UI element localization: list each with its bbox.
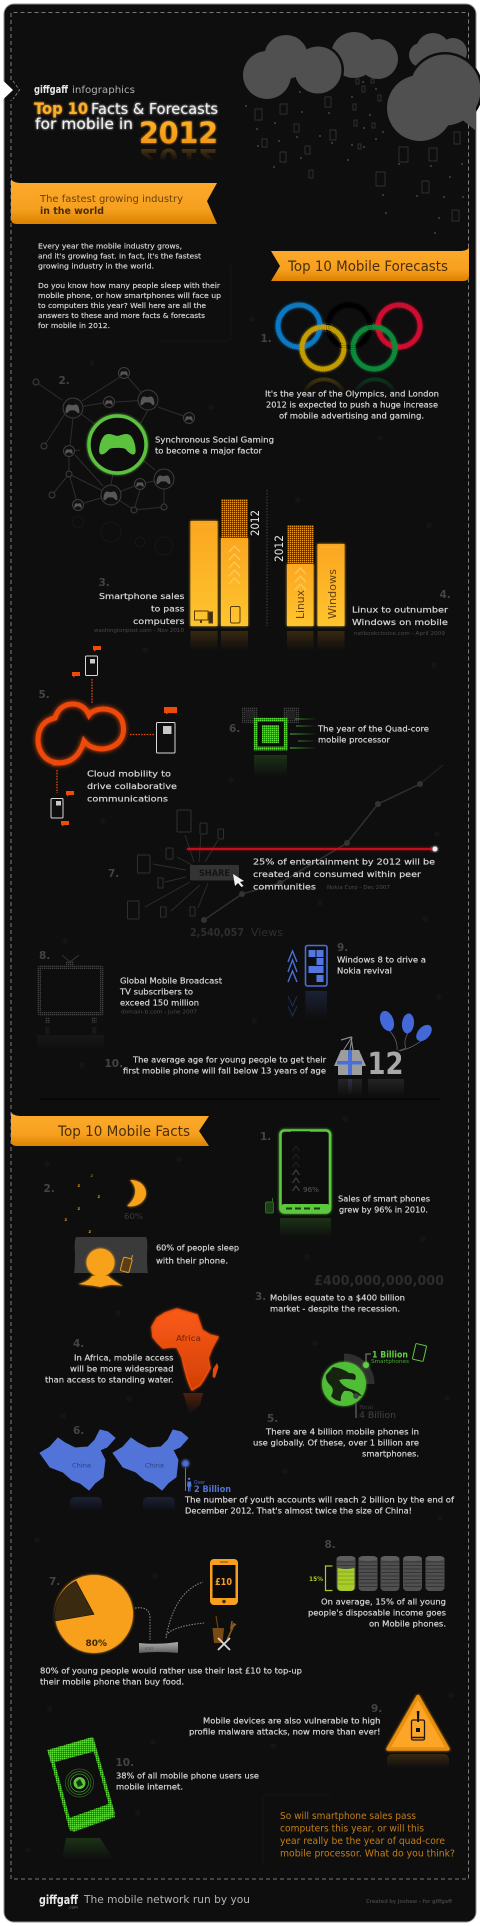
caption: computers: [133, 616, 184, 626]
footer logo: giffgaff: [39, 1892, 79, 1907]
number: 4.: [440, 589, 451, 601]
pie chart: 80%: [86, 1639, 107, 1649]
ribbon: fastest growing: The fastest growing industry: [39, 194, 183, 205]
zzz marks: [64, 1174, 100, 1248]
caption: [87, 768, 177, 804]
caption: [308, 1596, 446, 1628]
caption: It's the year of the Olympics, and London: [265, 388, 439, 398]
pin: [182, 1460, 189, 1491]
age 12: 12: [368, 1047, 404, 1082]
caption: [352, 604, 449, 637]
number: 8.: [39, 950, 50, 962]
caption: [189, 1716, 380, 1736]
linux bar: Linux: [294, 590, 307, 619]
zzz marks: z: [90, 1174, 94, 1179]
green highlighted node: [89, 416, 146, 473]
caption: [265, 388, 439, 420]
fact 2: sleep with phone: [44, 1174, 239, 1287]
share button: [190, 865, 239, 880]
caption: Nokia revival: [337, 966, 392, 976]
caption: will be more widespread: [70, 1364, 174, 1374]
icon: green smartphone: 96%: [303, 1186, 319, 1194]
clouds raining phones: [243, 32, 480, 233]
number: 9.: [337, 942, 348, 954]
caption: Linux to outnumber: [352, 604, 449, 614]
logo line: infographics: [72, 85, 135, 96]
ribbon: top 10 mobile forecasts: Top 10 Mobile Forecasts: [287, 259, 448, 275]
olympic rings: [278, 305, 420, 369]
icon: dotted TV: [39, 955, 102, 1023]
caption: exceed 150 million: [120, 998, 199, 1008]
shared phones: [128, 810, 224, 919]
credit: Created by Joshaw - for giffgaff: [366, 1899, 452, 1905]
title: for mobile in: [35, 115, 133, 133]
zzz marks: z: [98, 1195, 100, 1200]
caption: drive collaborative: [87, 781, 177, 791]
caption: [45, 1352, 174, 1384]
intro text block: to computers this year? Well here are all the: [38, 301, 207, 310]
caption: In Africa, mobile access: [74, 1352, 174, 1362]
caption: There are 4 billion mobile phones in: [265, 1426, 419, 1436]
caption: on Mobile phones.: [369, 1618, 446, 1628]
icon: tilted dotted phone: [47, 1737, 115, 1832]
icon: person: [78, 1248, 123, 1287]
dotted paths: [135, 1582, 204, 1640]
footer logo: .com: [68, 1906, 79, 1910]
number: 5.: [38, 689, 50, 701]
intro text block: for mobile in 2012.: [38, 321, 110, 330]
caption: [123, 1054, 327, 1076]
forecast 5: cloud mobility: [38, 646, 177, 826]
total callout: Total: [358, 1405, 373, 1411]
caption: created and consumed within peer: [253, 869, 422, 879]
closing question: So will smartphone sales pass: [280, 1811, 416, 1822]
intro text block: [38, 242, 221, 330]
phone screens: [56, 659, 172, 806]
caption: TV subscribers to: [119, 986, 193, 996]
icon: phone: [230, 606, 240, 623]
caption: communications: [87, 794, 168, 804]
triangle reflection: [387, 1754, 449, 1768]
icon: orange phone: [210, 1559, 238, 1605]
forecast 8: mobile TV: [37, 950, 223, 1051]
caption: Windows 8 to drive a: [337, 954, 426, 964]
icon: pillow: [74, 1237, 148, 1273]
forecast 3: smartphone sales bars: [94, 499, 262, 651]
intro text block: Do you know how many people sleep with their: [38, 281, 220, 290]
title reflection: 2012: [139, 142, 218, 176]
number: 5.: [267, 1413, 278, 1425]
caption: 80% of young people would rather use their last £10 to top-up: [40, 1666, 302, 1676]
caption: 60% of people sleep: [156, 1242, 239, 1252]
smartphones callout: [363, 1343, 427, 1368]
number: 6.: [73, 1425, 84, 1437]
gift reflection: [338, 1079, 404, 1096]
smartphones bar: [221, 499, 248, 626]
rings reflection: [304, 379, 395, 394]
coin stacks: [336, 1556, 444, 1591]
maps: China: [40, 1430, 188, 1490]
forecast 10: young people: [104, 1009, 435, 1096]
caption: 38% of all mobile phone users use: [116, 1770, 259, 1780]
icon: chip: [242, 707, 317, 750]
caption: [116, 1770, 259, 1792]
zzz marks: z: [78, 1243, 80, 1248]
map: Africa: [152, 1309, 218, 1390]
views counter: 2,540,057: [190, 926, 244, 939]
caption: [184, 1494, 455, 1516]
caption: 2012 is expected to push a huge increase: [266, 400, 438, 410]
maps: China: China: [72, 1462, 91, 1470]
caption: Cloud mobility to: [87, 768, 171, 778]
caption: [155, 434, 274, 456]
network edges: [36, 373, 189, 510]
number: 3.: [255, 1291, 266, 1303]
TV reflection: [37, 1027, 104, 1051]
chip reflection: [254, 755, 287, 777]
title: 2012: [139, 116, 218, 150]
caption: Synchronous Social Gaming: [155, 434, 274, 444]
fact 7: last ten pounds: [40, 1559, 302, 1686]
percent label: 15%: [309, 1575, 323, 1583]
maps reflection: [70, 1497, 175, 1511]
caption: mobile internet.: [116, 1782, 183, 1792]
fact 6: youth accounts: [40, 1425, 455, 1516]
label 2012 right: 2012: [272, 535, 286, 562]
fact 8: disposable income: [308, 1539, 446, 1628]
icon: tenner: [139, 1642, 178, 1653]
caption: [40, 1666, 302, 1686]
zzz marks: z: [78, 1207, 80, 1212]
intro text block: Every year the mobile industry grows,: [38, 242, 182, 250]
caption: smartphones.: [362, 1448, 419, 1458]
closing question: [263, 1795, 455, 1865]
caption: washingtonpost.com - Nov 2010: [94, 628, 184, 634]
caption: The number of youth accounts will reach 2 billion by the end of: [184, 1494, 455, 1504]
caption: [337, 954, 426, 976]
logo line: [34, 84, 135, 96]
caption: [317, 724, 429, 744]
fact 5: global phones: [253, 1343, 427, 1458]
icon: cursor: [233, 874, 244, 887]
number: 2.: [58, 375, 70, 387]
amount: £400,000,000,000: [314, 1273, 444, 1289]
chevrons: [229, 546, 240, 584]
caption: [94, 591, 184, 634]
falling phones: [255, 79, 460, 221]
total callout: 4 Billion: [359, 1411, 396, 1421]
ribbon: top 10 mobile facts: [11, 1112, 209, 1146]
zzz marks: z: [64, 1218, 68, 1223]
number: 10.: [116, 1757, 134, 1769]
caption: of mobile advertising and gaming.: [279, 410, 424, 420]
number: 8.: [324, 1539, 336, 1551]
label 2012 left: 2012: [248, 510, 262, 536]
icon: tenner: £10: [145, 1646, 153, 1650]
fact 9: malware: [189, 1696, 449, 1768]
forecast 4: linux vs windows bars: [272, 525, 451, 651]
background specks: [25, 316, 454, 1853]
share button: SHARE: [199, 869, 230, 879]
tagline: The mobile network run by you: [83, 1894, 250, 1906]
closing question: mobile processor. What do you think?: [280, 1848, 455, 1860]
caption: with their phone.: [156, 1256, 228, 1266]
windows bar: [318, 544, 344, 626]
number: 2.: [44, 1183, 55, 1195]
moon percent: 60%: [124, 1212, 143, 1221]
caption: Mobile devices are also vulnerable to high: [203, 1716, 380, 1726]
windows bar: Windows: [326, 569, 339, 619]
ribbon: top 10 mobile facts: Top 10 Mobile Facts: [57, 1124, 190, 1140]
icon: old phone: [266, 1198, 274, 1213]
caption: Nokia Corp - Dec 2007: [327, 885, 390, 891]
forecast 1: olympics: [260, 305, 439, 420]
number: 1.: [260, 333, 272, 345]
icon: gift: [334, 1037, 366, 1075]
forecast 7: sharing: [108, 765, 443, 939]
pie chart: [55, 1575, 133, 1653]
caption: to pass: [151, 604, 184, 614]
number: 3.: [98, 577, 110, 589]
views counter: [190, 926, 283, 939]
header: giffgaff infographics: [34, 84, 218, 176]
total callout: [353, 1393, 396, 1421]
caption: netbookchoice.com - April 2009: [354, 631, 445, 637]
closing question: computers this year, or will this: [280, 1824, 424, 1834]
chat bubbles: [61, 646, 177, 826]
linux bar: [287, 525, 314, 626]
red progress line: [187, 846, 438, 852]
icon: warning triangle: [388, 1696, 448, 1749]
smartphones callout: Smartphones: [371, 1359, 409, 1365]
bars reflection: [287, 631, 344, 651]
forecast 6: quad-core: [229, 707, 429, 777]
caption: use globally. Of these, over 1 billion are: [253, 1438, 419, 1448]
title: Top 10: [34, 99, 88, 118]
fact 10: mobile internet: [47, 1737, 259, 1860]
caption: [338, 1194, 430, 1214]
caption: December 2012. That's almost twice the size of China!: [185, 1506, 412, 1516]
caption: mobile processor: [318, 734, 391, 744]
icon: computer: [194, 611, 212, 623]
number: 4.: [73, 1338, 84, 1350]
forecast 2: social gaming network: [33, 368, 274, 555]
2 billion callout: Over: [194, 1480, 205, 1486]
notch: white tab on left edge: [4, 81, 20, 99]
caption: Sales of smart phones: [338, 1194, 430, 1204]
caption: grew by 96% in 2010.: [339, 1204, 428, 1214]
caption: Mobiles equate to a $400 billion: [270, 1292, 405, 1302]
chevrons: [288, 951, 297, 982]
fact 4: africa: [45, 1309, 218, 1415]
intro text block: answers to these and more facts & forecasts: [38, 311, 205, 320]
caption: On average, 15% of all young: [321, 1596, 446, 1606]
caption: market - despite the recession.: [270, 1304, 400, 1314]
number: 6.: [229, 723, 240, 735]
caption: domain-b.com - June 2007: [121, 1010, 197, 1016]
icon: orange cloud: [38, 704, 124, 763]
fact 3: market size: [255, 1273, 444, 1314]
caption: profile malware attacks, now more than ever!: [189, 1726, 380, 1736]
node gamepads: [65, 371, 193, 508]
smartphones callout: 1 Billion: [372, 1350, 408, 1360]
phone reflection: [306, 991, 327, 1019]
title: [34, 99, 218, 150]
caption: to become a major factor: [155, 446, 263, 456]
caption: 25% of entertainment by 2012 will be: [253, 856, 435, 866]
zzz marks: z: [78, 1184, 80, 1189]
clouds: [243, 32, 480, 141]
icon: windows phone: [306, 946, 327, 986]
computers bar: [190, 521, 218, 626]
caption: communities: [253, 882, 316, 892]
balloons: [377, 1009, 435, 1051]
caption: Windows on mobile: [352, 617, 448, 627]
caption: [253, 856, 435, 892]
logo line: giffgaff: [34, 84, 68, 96]
intro text block: mobile phone, or how smartphones will face up: [38, 291, 221, 300]
fact 1: smartphone growth: [260, 1130, 430, 1238]
bars reflection: [190, 631, 248, 651]
ribbon: fastest growing: in the world: [40, 206, 104, 217]
views counter: Views: [251, 926, 283, 939]
icon: orange phone: £10: [215, 1577, 232, 1588]
number: 10.: [104, 1058, 123, 1070]
caption: [253, 1426, 419, 1458]
closing question: year really be the year of quad-core: [280, 1836, 445, 1847]
caption: [119, 976, 223, 1016]
caption: [270, 1292, 405, 1314]
zzz marks: z: [88, 1230, 92, 1235]
intro text block: growing industry in the world.: [38, 262, 154, 270]
map reflection: [183, 1393, 203, 1415]
number: 7.: [108, 868, 119, 880]
ribbon: top 10 mobile forecasts: [271, 247, 469, 281]
caption: Smartphone sales: [99, 591, 184, 601]
icon: food crossed out: [212, 1616, 236, 1650]
chevrons reflection: [288, 996, 297, 1016]
network nodes: [33, 368, 194, 513]
map: Africa: Africa: [176, 1334, 201, 1343]
bracket: [326, 1566, 332, 1590]
2 billion callout: 2 Billion: [194, 1485, 231, 1495]
falling dots: [246, 82, 463, 233]
phone reflection: [280, 1218, 331, 1238]
number: 7.: [49, 1576, 60, 1588]
network reflection: [72, 516, 173, 555]
icon: moon: [127, 1180, 146, 1206]
ribbon: fastest growing: [11, 179, 217, 224]
title: Facts & Forecasts: [91, 100, 218, 118]
2 billion callout: [187, 1478, 231, 1495]
gray arc: [344, 1358, 370, 1384]
number: 9.: [371, 1703, 382, 1715]
caption: than access to standing water.: [45, 1374, 174, 1384]
phones: [51, 656, 175, 818]
share rays: [145, 835, 218, 911]
caption: Global Mobile Broadcast: [120, 976, 223, 986]
caption: [156, 1242, 239, 1266]
icon: small phone: [120, 1253, 133, 1273]
intro text block: and it's growing fast. In fact, it's the fastest: [38, 252, 201, 260]
caption: The average age for young people to get their: [132, 1054, 327, 1064]
caption: first mobile phone will fall below 13 years of age: [123, 1066, 326, 1076]
icon: globe: [322, 1362, 366, 1406]
views graph: [201, 765, 443, 923]
caption: their mobile phone than buy food.: [40, 1676, 184, 1686]
icon: green smartphone: [280, 1130, 330, 1213]
number: 1.: [260, 1131, 271, 1143]
icon: signal target: [66, 1769, 94, 1797]
phone reflection: [62, 1838, 114, 1860]
caption: The year of the Quad-core: [317, 724, 429, 734]
caption: people's disposable income goes: [308, 1608, 446, 1618]
footer: [39, 1892, 452, 1910]
maps: China: China: [145, 1462, 164, 1470]
forecast 9: windows 8 nokia: [288, 942, 426, 1019]
footer logo: [39, 1892, 79, 1910]
dotted links: [57, 679, 154, 793]
